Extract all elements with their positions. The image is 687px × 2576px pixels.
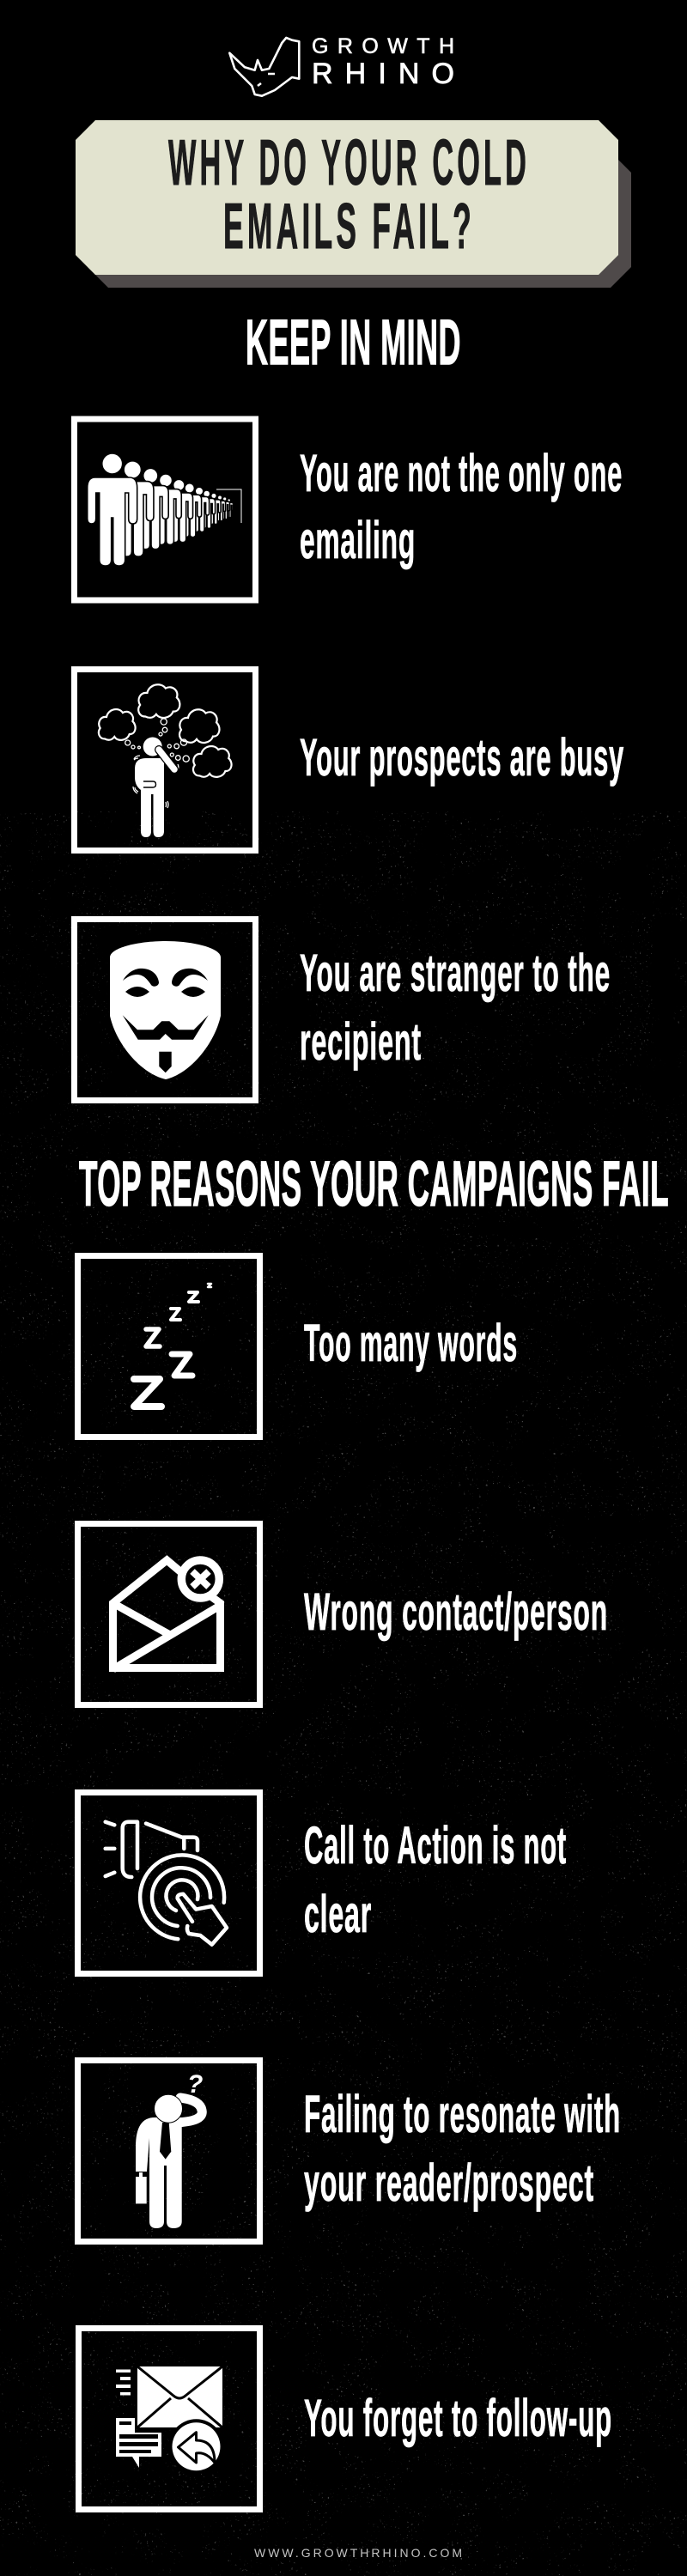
icon: sleeping Zs <box>134 1284 211 1406</box>
panel: too many words <box>77 1255 518 1437</box>
frame <box>77 1523 259 1705</box>
footer url: WWW.GROWTHRHINO.COM <box>254 2546 462 2560</box>
panel: not the only one <box>74 419 623 600</box>
panel: wrong contact <box>77 1523 608 1705</box>
text <box>300 444 623 569</box>
panel: forget to follow up <box>79 2329 612 2509</box>
panel: call to action <box>77 1793 567 1973</box>
icon: confused businessman <box>136 2070 203 2228</box>
text: recipient <box>300 1012 422 1071</box>
text: KEEP IN MIND <box>246 307 461 378</box>
icon: confused businessman: ? <box>187 2070 203 2099</box>
icon: button and click hand <box>106 1822 227 1945</box>
frame <box>79 2329 259 2509</box>
icon: envelope with x <box>113 1560 220 1669</box>
logo: Growth Rhino <box>229 34 454 96</box>
panel: failing to resonate <box>77 2061 621 2241</box>
logo wordmark line 2: RHINO <box>312 58 454 90</box>
frame <box>77 1255 259 1437</box>
text <box>304 2085 621 2212</box>
panel: prospects are busy <box>74 670 624 850</box>
banner shadow <box>88 152 631 288</box>
icon: mail with reply <box>116 2366 223 2474</box>
icon: rhino head <box>229 38 299 96</box>
text <box>300 944 611 1071</box>
icon: thinking person with clouds <box>99 684 232 837</box>
text: emailing <box>300 511 416 569</box>
frame <box>74 919 256 1101</box>
title banner <box>76 120 631 288</box>
logo wordmark line 1: GROWTH <box>312 34 454 58</box>
banner face <box>76 120 618 275</box>
icon: queue of people <box>88 453 241 566</box>
text: clear <box>304 1885 372 1943</box>
panel: stranger to the recipient <box>74 919 611 1101</box>
text <box>304 1816 567 1943</box>
frame <box>74 670 256 850</box>
frame <box>74 419 256 600</box>
frame <box>77 2061 259 2241</box>
frame <box>77 1793 259 1973</box>
icon: mask <box>110 941 221 1079</box>
